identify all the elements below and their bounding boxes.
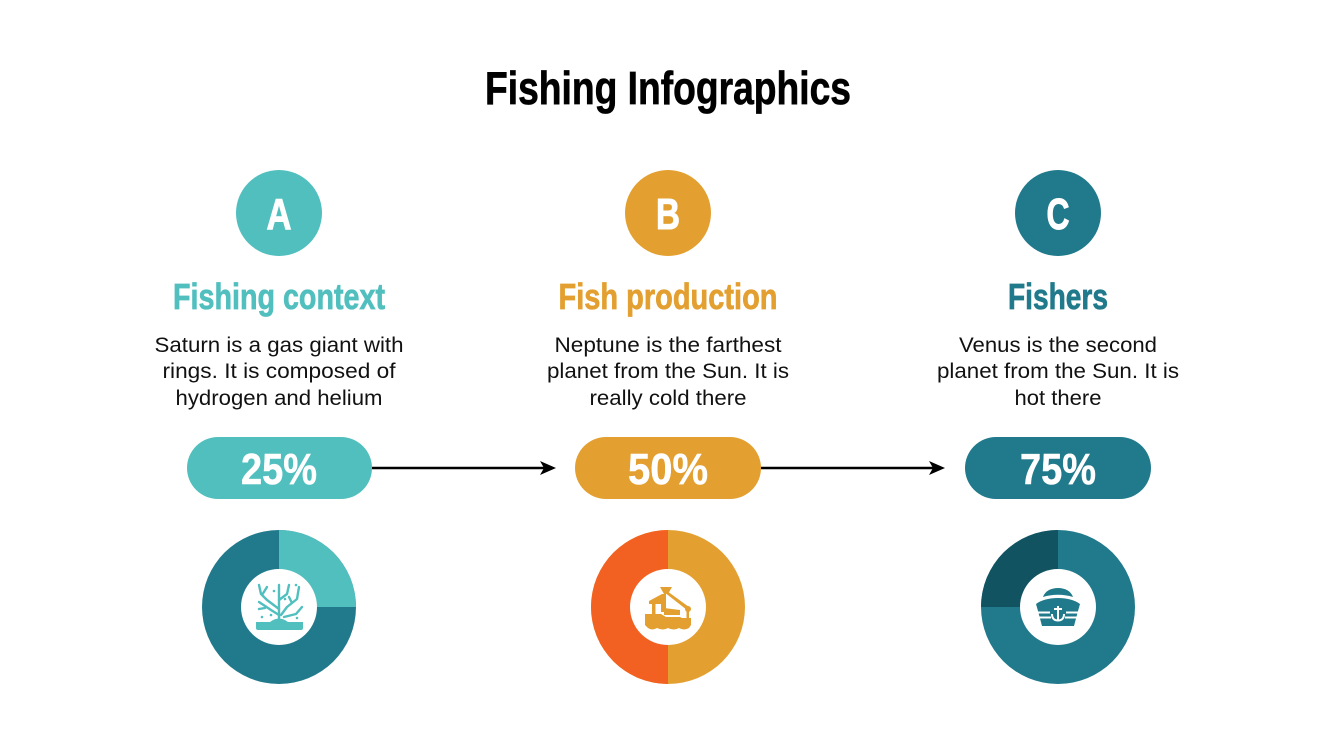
donut chart: 75% bbox=[981, 530, 1135, 684]
pill: 50% bbox=[575, 437, 761, 499]
text block: fish production: planet from the Sun. It is bbox=[547, 359, 789, 383]
badge A: A bbox=[266, 190, 292, 239]
title: Fishing Infographics bbox=[485, 62, 851, 114]
pill: 75%: 75% bbox=[1020, 445, 1096, 494]
heading: fishing context: Fishing context bbox=[173, 276, 385, 317]
text block: fish production bbox=[547, 333, 789, 410]
text block: fishing context bbox=[154, 333, 404, 410]
text block: fishing context: rings. It is composed of bbox=[162, 359, 396, 383]
donut chart: 25% bbox=[202, 530, 356, 684]
arrow: A to B bbox=[372, 461, 556, 475]
icon: fishing boat with crane bbox=[645, 587, 691, 630]
badge B bbox=[625, 170, 711, 256]
icon: sailor hat with anchor bbox=[1036, 588, 1080, 626]
donut chart: 50% bbox=[591, 530, 745, 684]
text block: fishers: hot there bbox=[1014, 386, 1102, 410]
badge C bbox=[1015, 170, 1101, 256]
text block: fishers: planet from the Sun. It is bbox=[937, 359, 1179, 383]
panel: fishing context bbox=[154, 170, 1179, 684]
text block: fish production: really cold there bbox=[590, 386, 746, 410]
panel: fish production bbox=[547, 170, 1179, 684]
badge C: C bbox=[1046, 190, 1070, 239]
badge A bbox=[236, 170, 322, 256]
icon: coral bbox=[256, 584, 303, 630]
pill: 25% bbox=[187, 437, 372, 499]
heading: fish production: Fish production bbox=[558, 276, 778, 317]
text block: fishing context: Saturn is a gas giant with bbox=[154, 333, 404, 357]
panel: fishers bbox=[937, 170, 1179, 684]
text block: fishing context: hydrogen and helium bbox=[176, 386, 382, 410]
pill: 75% bbox=[965, 437, 1151, 499]
badge B: B bbox=[656, 190, 680, 239]
heading: fishers: Fishers bbox=[1008, 276, 1108, 317]
pill: 25%: 25% bbox=[241, 445, 317, 494]
text block: fishers bbox=[937, 333, 1179, 410]
text block: fish production: Neptune is the farthest bbox=[554, 333, 782, 357]
text block: fishers: Venus is the second bbox=[959, 333, 1157, 357]
pill: 50%: 50% bbox=[628, 445, 708, 494]
arrow: B to C bbox=[761, 461, 945, 475]
